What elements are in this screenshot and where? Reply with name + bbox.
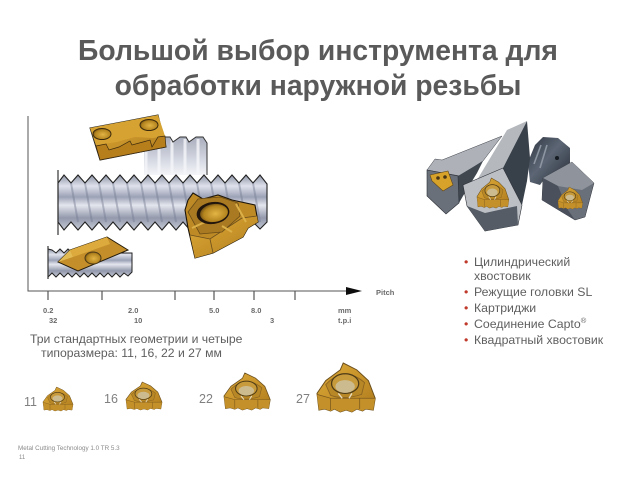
geometry text [30,332,242,360]
size label 27: 27 [296,392,310,406]
holder: left square shank [427,136,502,214]
axis arrow [346,287,362,295]
chart axes [28,116,350,300]
list item: • [464,285,468,299]
small lower screw [48,246,132,279]
geometry text: Три стандартных геометрии и четыре [30,332,242,346]
left insert [430,171,453,191]
list item: Квадратный хвостовик [474,333,603,347]
list item: Картриджи [474,301,536,315]
axis labels: t.p.i [338,316,351,325]
axis labels: 32 [49,316,57,325]
axis labels: mm [338,306,352,315]
list item: • [464,255,468,269]
axis labels [43,288,395,325]
page number: 11 [19,455,25,461]
list item: хвостовик [474,269,531,283]
axis labels: 8.0 [251,306,261,315]
holder list [464,255,604,347]
large triangular insert [185,193,258,258]
large screw [58,170,267,235]
footer source: Metal Cutting Technology 1.0 TR 5.3 [18,445,120,452]
list item: Цилиндрический [474,255,570,269]
axis labels: 5.0 [209,306,219,315]
tool holders [427,121,594,231]
title [78,34,558,101]
axis labels: 2.0 [128,306,138,315]
list item [464,255,570,283]
axis labels: Pitch [376,288,395,297]
geometry text: типоразмера: 11, 16, 22 и 27 мм [41,346,222,360]
holder: Capto head [542,162,594,220]
list item: Режущие головки SL [474,285,592,299]
central insert [477,178,509,208]
holder: Capto cylinder [528,137,570,185]
title: обработки наружной резьбы [115,69,521,101]
small rear screw [144,137,207,175]
size label 22: 22 [199,392,213,406]
holder: central shank [463,121,530,231]
axis labels: 10 [134,316,142,325]
parallelogram insert [58,237,128,271]
list item: • [464,333,468,347]
insert size 16 [126,382,162,410]
list item: • [464,301,468,315]
size label 16: 16 [104,392,118,406]
list item: • [464,317,468,331]
insert size 27 [317,363,375,412]
title: Большой выбор инструмента для [78,34,558,66]
axis labels: 3 [270,316,274,325]
pitch chart [28,115,362,300]
list item: Соединение Capto® [474,316,586,331]
rectangular insert [90,115,166,160]
size label 11: 11 [24,395,37,409]
insert size 11 [43,387,73,411]
insert size 22 [224,373,270,410]
axis labels: 0.2 [43,306,53,315]
right insert [558,187,583,209]
